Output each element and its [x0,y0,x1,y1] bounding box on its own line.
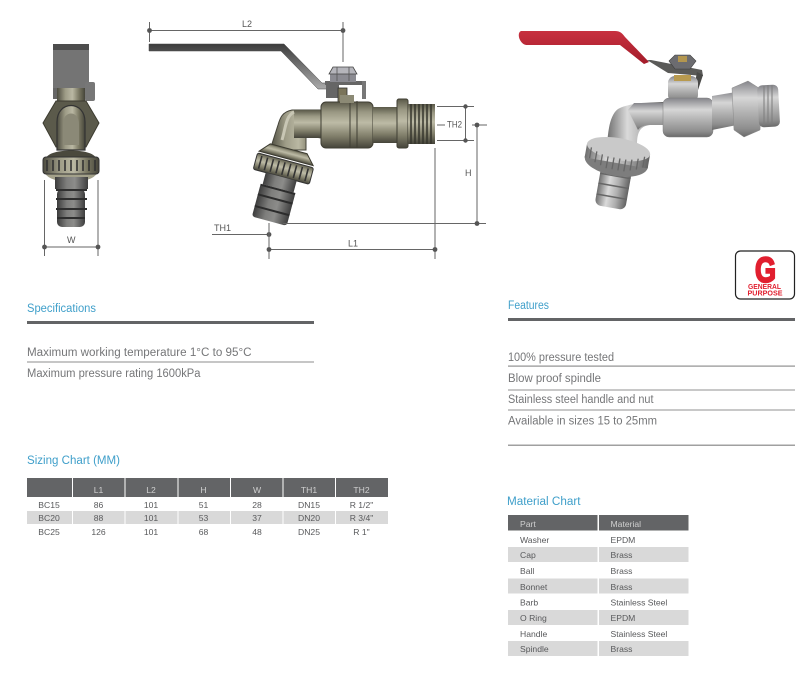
material row: barb: Stainless Steel [610,598,667,608]
heading: specifications: Specifications [27,303,96,315]
W dimension: W [67,235,76,245]
table row BC25: 48 [252,527,262,537]
material row: ball [520,566,632,576]
table row BC15: 86 [94,500,103,510]
material row: cap: Brass [610,550,632,560]
material row: cap: Cap [520,550,536,560]
panel: features [508,300,795,446]
table row BC25: R 1" [353,527,370,537]
table row BC15: 101 [144,500,158,510]
table header row: H [200,485,207,495]
L1 dimension: L1 [348,238,358,248]
table row BC25: BC25 [38,527,60,537]
table row BC15: 51 [199,500,208,510]
TH1 dimension: TH1 [214,223,231,233]
table row BC20: R 3/4" [350,513,373,523]
material row: washer: Washer [520,535,549,545]
H dimension [283,123,487,226]
W dimension [42,180,100,256]
table row BC20: 37 [252,513,262,523]
table header row: TH1 [301,485,317,495]
table row BC25: 101 [144,527,158,537]
table row BC15: R 1/2" [350,500,373,510]
badge: general purpose: G [755,251,776,290]
product photo: red lever bib tap [519,31,780,213]
L2 dimension: L2 [242,19,252,29]
table row BC20: BC20 [38,513,60,523]
table header row: W [253,485,262,495]
TH2 dimension: TH2 [447,120,462,130]
feature: stainless handle and nut: Stainless steel handle and nut [508,394,654,406]
side view drawing with dimensions [147,19,487,259]
material row: handle [520,629,667,639]
table row BC20 [27,511,388,524]
material row: spindle: Brass [610,644,632,654]
material row: barb [520,598,667,608]
material row: ball: Ball [520,566,534,576]
L1 dimension [267,148,437,259]
material row: bonnet [508,578,688,594]
TH1 dimension [212,223,271,237]
material row: barb: Barb [520,598,538,608]
badge: general purpose [736,251,794,299]
material row: spindle [508,641,688,656]
H dimension: H [465,168,472,178]
icon: valve body front view [43,88,99,182]
material row: spindle: Spindle [520,644,549,654]
material row: washer [520,535,635,545]
icon: valve body side view [270,95,435,150]
feature: pressure tested: 100% pressure tested [508,352,614,364]
panel: material chart [507,496,688,656]
front view drawing with W dimension [42,44,100,256]
feature: blow proof spindle: Blow proof spindle [508,373,601,385]
material row: o ring: O Ring [520,613,547,623]
table row BC15: DN15 [298,500,320,510]
icon: nickel valve body [607,75,780,146]
table row BC15: BC15 [38,500,60,510]
table row BC20: 88 [94,513,103,523]
icon: lever handle side view [149,44,366,103]
icon: hose barb front view [55,177,88,227]
panel: sizing chart [27,455,388,537]
icon: angled collar and hose barb side view [241,141,317,229]
spec: pressure rating: Maximum pressure rating 1600kPa [27,368,201,380]
material table header: Material [610,519,641,529]
table row BC15: 28 [252,500,262,510]
table row BC25: 68 [199,527,208,537]
table header row [27,478,388,497]
badge: general purpose: PURPOSE [748,288,782,298]
table row BC20: DN20 [298,513,320,523]
spec: working temperature: Maximum working temperature 1°C to 95°C [27,347,251,359]
material row: cap [508,547,688,562]
material row: bonnet: Bonnet [520,582,548,592]
material row: ball: Brass [610,566,632,576]
table row BC25: DN25 [298,527,320,537]
icon: lever handle front view [53,44,95,101]
material row: o ring: EPDM [610,613,635,623]
material row: handle: Handle [520,629,547,639]
table header row: L2 [146,485,156,495]
material table header [508,515,688,530]
table row BC25: 126 [91,527,106,537]
feature: available sizes: Available in sizes 15 to 25mm [508,416,657,428]
badge: general purpose: GENERAL [748,282,781,291]
L2 dimension [147,19,345,62]
table header row: TH2 [353,485,370,495]
material row: handle: Stainless Steel [610,629,667,639]
table row BC20: 53 [199,513,208,523]
material row: o ring [508,610,688,625]
heading: features: Features [508,300,549,312]
material row: washer: EPDM [610,535,635,545]
icon: knurled collar and barb [577,133,652,213]
TH2 dimension [437,104,474,143]
table row BC15 [38,500,373,510]
icon: spindle nut [669,55,696,69]
heading: sizing chart: Sizing Chart (MM) [27,455,120,467]
icon: red lever handle [519,31,703,90]
table row BC20: 101 [144,513,158,523]
table row BC25 [38,527,370,537]
table header row: L1 [94,485,103,495]
heading: material chart: Material Chart [507,496,581,508]
panel: specifications [27,303,314,380]
material table header: Part [520,519,536,529]
material row: bonnet: Brass [610,582,632,592]
